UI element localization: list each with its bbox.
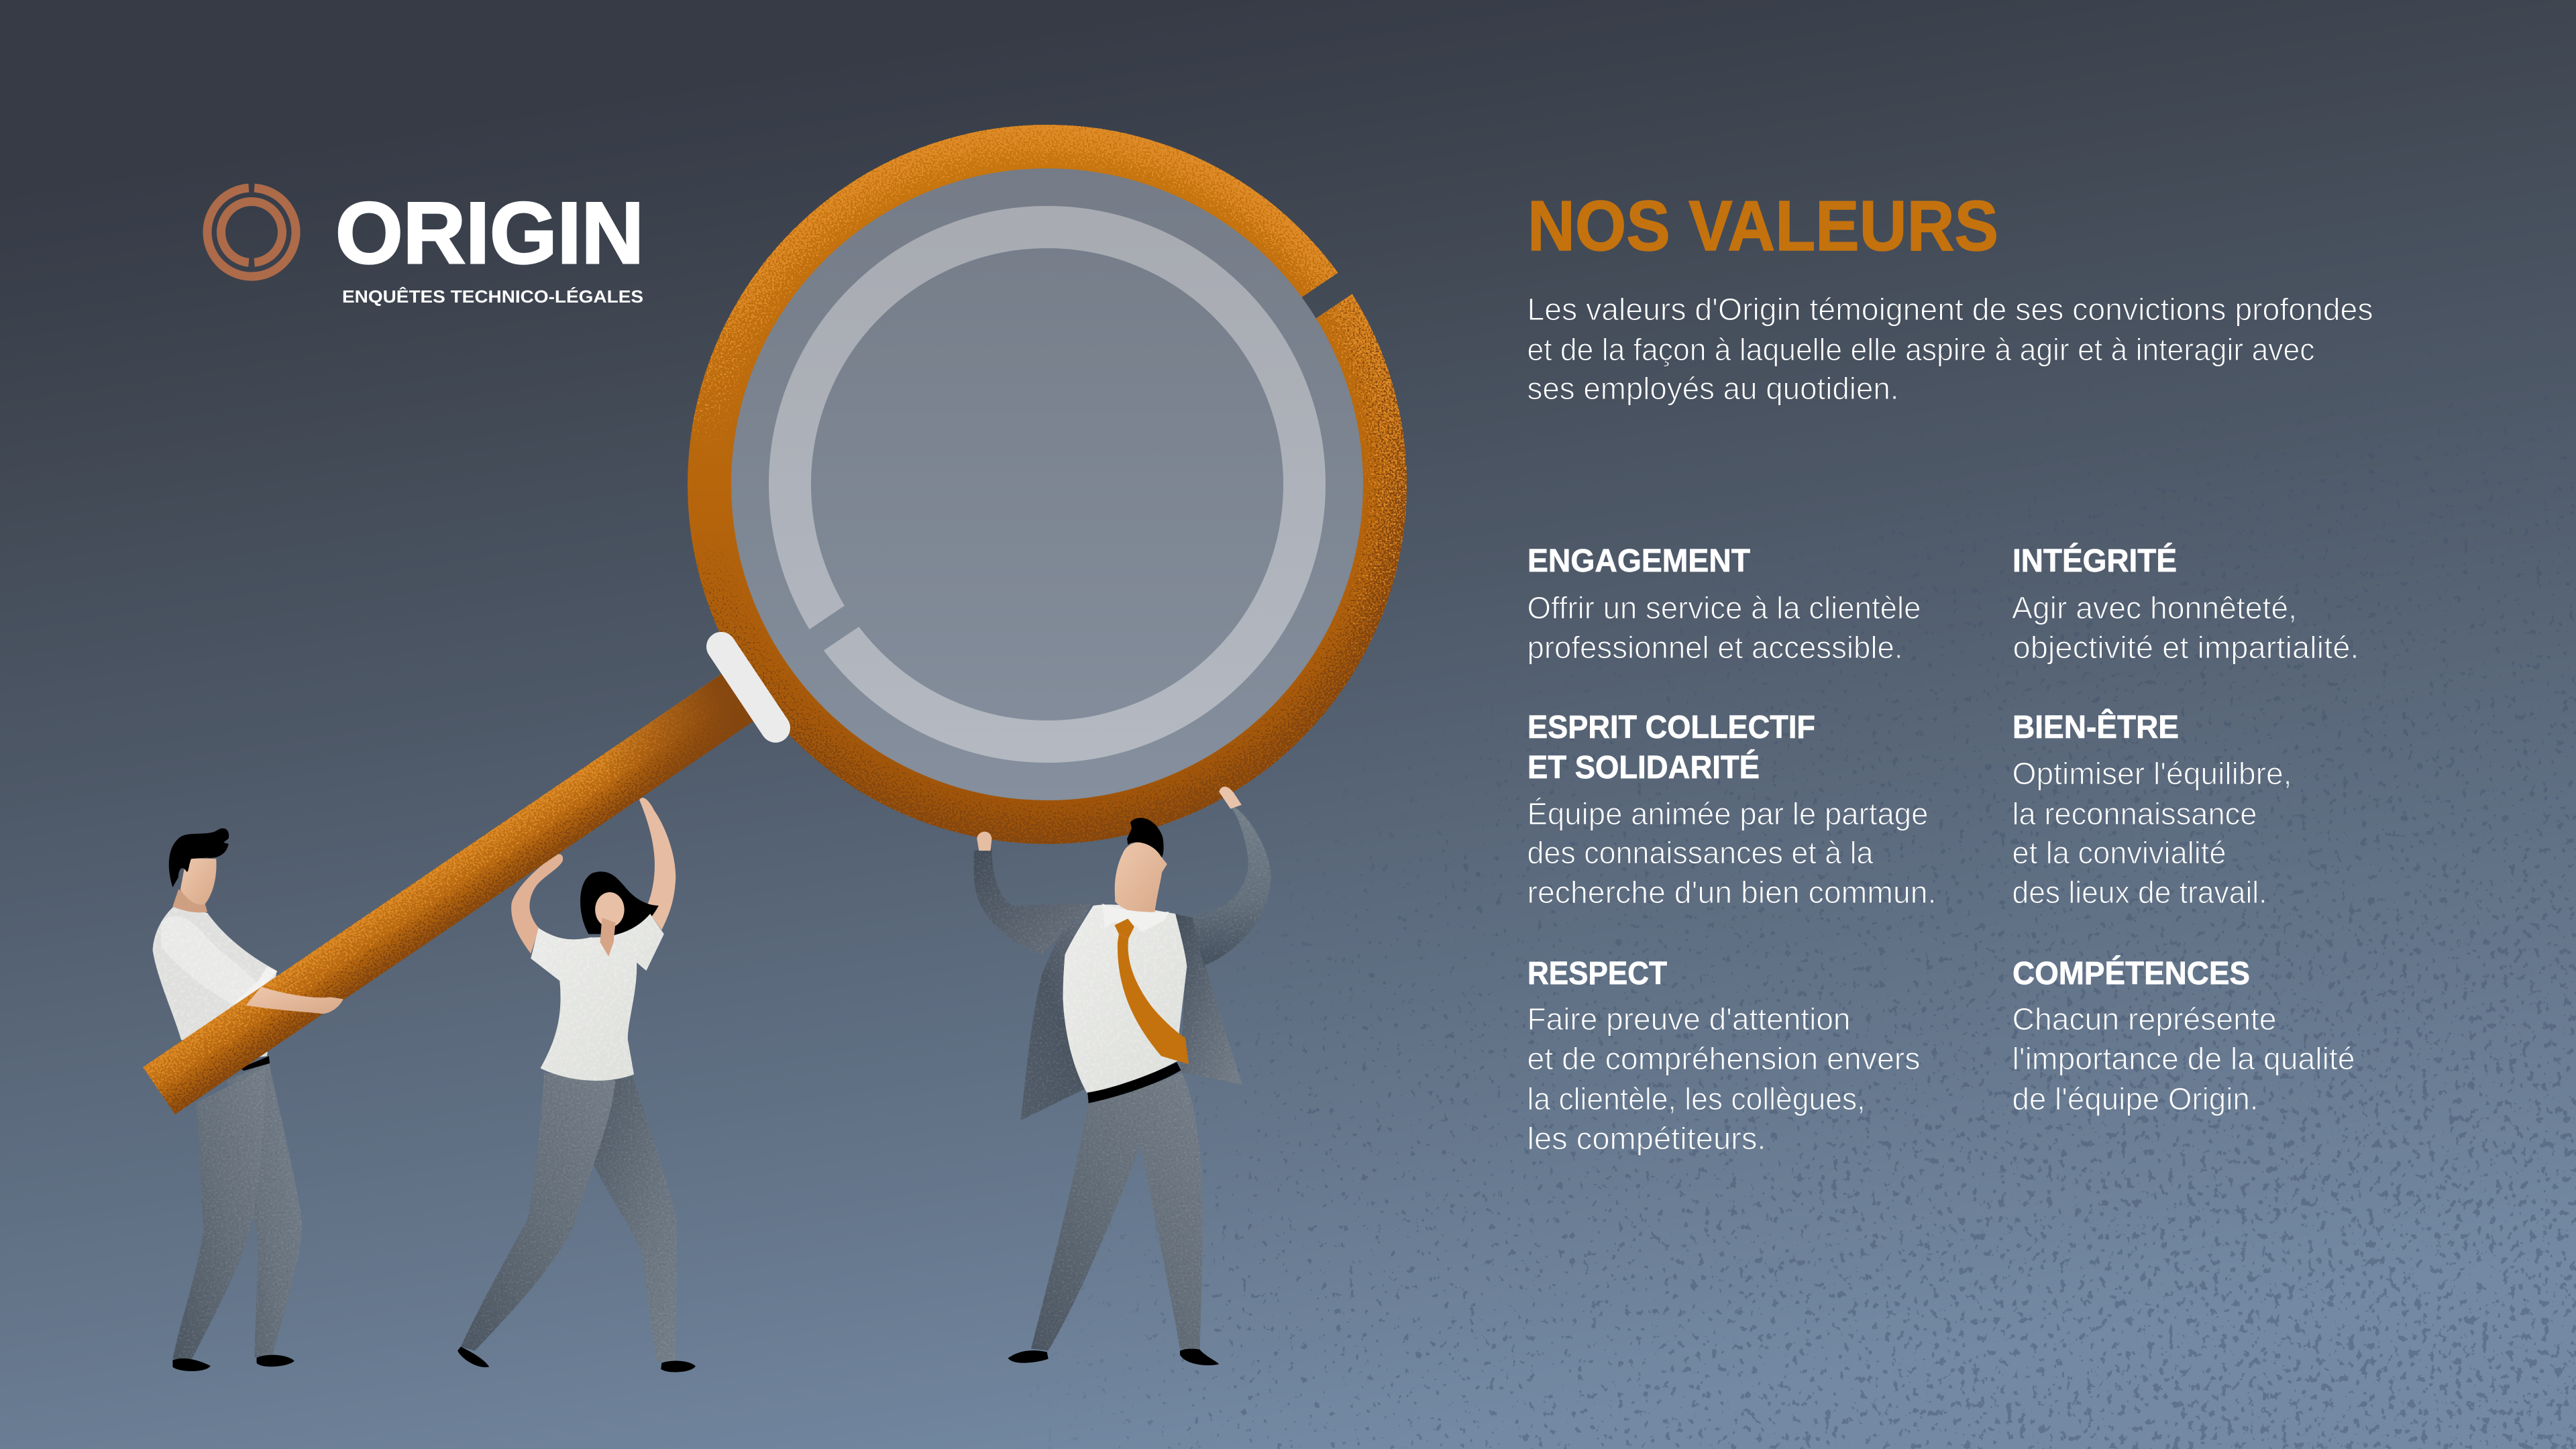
value: bien-être: la reconnaissance (2012, 796, 2257, 831)
value: compétences (2012, 955, 2355, 1116)
value: compétences: de l'équipe Origin. (2012, 1081, 2258, 1116)
value: intégrité: INTÉGRITÉ (2012, 543, 2177, 579)
value: esprit collectif et solidarité: recherche d'un bien commun. (1527, 875, 1936, 910)
value: engagement: professionnel et accessible. (1527, 630, 1902, 665)
value: compétences: l'importance de la qualité (2012, 1041, 2355, 1076)
intro paragraph: Les valeurs d'Origin témoignent de ses convictions profondes (1527, 292, 2373, 327)
value: respect (1527, 956, 1920, 1156)
value: engagement: Offrir un service à la clientèle (1527, 590, 1921, 625)
value: compétences: Chacun représente (2012, 1002, 2277, 1036)
value: respect: la clientèle, les collègues, (1527, 1081, 1865, 1116)
logo (207, 184, 644, 307)
value: respect: Faire preuve d'attention (1527, 1002, 1850, 1036)
magnifier lens (731, 168, 1363, 800)
value: esprit collectif et solidarité: Équipe animée par le partage (1527, 796, 1928, 831)
value: bien-être: BIEN-ÊTRE (2012, 708, 2179, 745)
heading: NOS VALEURS (1527, 186, 1998, 266)
value: respect: les compétiteurs. (1527, 1121, 1766, 1156)
magnifier handle (143, 653, 786, 1114)
value: bien-être (2012, 708, 2292, 910)
intro paragraph: ses employés au quotidien. (1527, 371, 1898, 406)
value: engagement (1527, 543, 1921, 665)
value: bien-être: des lieux de travail. (2012, 875, 2267, 910)
figure: man in suit holding the ring (973, 787, 1271, 1365)
logo tagline: ENQUÊTES TECHNICO-LÉGALES (342, 286, 643, 307)
value: bien-être: Optimiser l'équilibre, (2012, 756, 2292, 791)
logo wordmark: ORIGIN (335, 184, 644, 282)
magnifier light reflection ring (790, 227, 1304, 742)
intro paragraph (1527, 292, 2373, 406)
value: compétences: COMPÉTENCES (2012, 955, 2250, 991)
magnifier white collar (721, 647, 775, 728)
value: esprit collectif et solidarité: ET SOLIDARITÉ (1527, 749, 1760, 786)
value: intégrité: objectivité et impartialité. (2012, 630, 2359, 665)
value: esprit collectif et solidarité: des connaissances et à la (1527, 835, 1874, 870)
figure: man holding the handle (body) (153, 828, 302, 1371)
value: intégrité: Agir avec honnêteté, (2012, 590, 2297, 625)
value: respect: RESPECT (1527, 956, 1667, 991)
value: engagement: ENGAGEMENT (1527, 543, 1750, 579)
value: intégrité (2012, 543, 2359, 665)
logo mark: concentric rings (207, 188, 296, 276)
figure: woman lifting the handle (458, 798, 696, 1372)
value: bien-être: et la convivialité (2012, 835, 2226, 870)
icon: magnifying glass (143, 125, 1407, 1114)
intro paragraph: et de la façon à laquelle elle aspire à agir et à interagir avec (1527, 332, 2314, 367)
figure: man forearm over the handle (246, 987, 343, 1014)
magnifier orange ring (688, 125, 1407, 844)
value: esprit collectif et solidarité: ESPRIT COLLECTIF (1527, 710, 1815, 745)
value: esprit collectif et solidarité (1527, 710, 1936, 910)
value: respect: et de compréhension envers (1527, 1041, 1920, 1076)
